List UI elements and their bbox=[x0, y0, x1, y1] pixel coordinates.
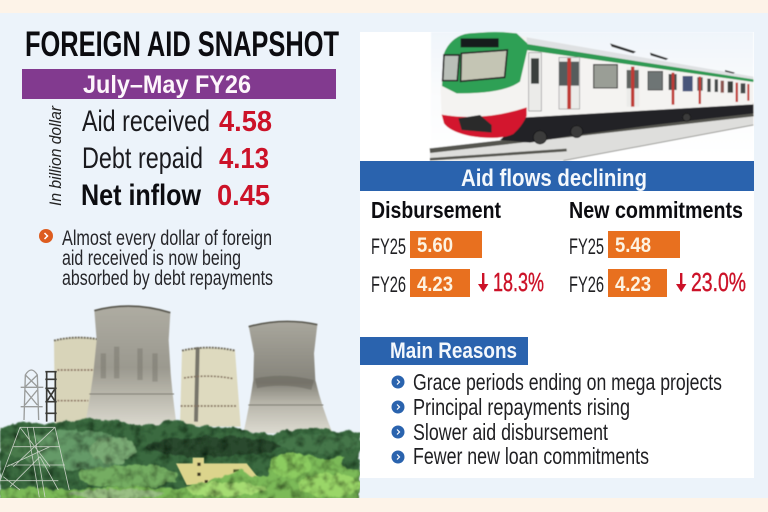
undercarriage bbox=[500, 103, 753, 143]
section banner bbox=[360, 161, 754, 192]
panel: aid flows declining bbox=[360, 161, 754, 297]
FY25 bar: 5.60 bbox=[417, 234, 453, 257]
note text: Almost every dollar of foreign bbox=[62, 227, 272, 250]
row: net inflow: Net inflow bbox=[81, 179, 201, 212]
row: aid received: Aid received bbox=[82, 105, 210, 138]
FY25 label: FY25 bbox=[371, 234, 406, 259]
upper pylon bbox=[21, 370, 43, 420]
panel: main reasons bbox=[360, 337, 722, 469]
reason 2: Principal repayments rising bbox=[413, 394, 630, 420]
note text: absorbed by debt repayments bbox=[62, 267, 273, 290]
FY25 bar: 5.48 bbox=[615, 234, 651, 257]
chart: disbursement bbox=[371, 197, 544, 297]
FY26 bar bbox=[410, 269, 470, 297]
arrow: down bbox=[478, 273, 488, 292]
lower pylon bbox=[0, 427, 69, 497]
foliage bbox=[0, 419, 363, 503]
period banner bbox=[22, 69, 336, 99]
coupler bbox=[458, 115, 492, 133]
house bbox=[176, 458, 260, 485]
side doors and windows bbox=[529, 53, 749, 111]
period banner: July–May FY26 bbox=[83, 71, 251, 99]
photo: metro train bbox=[430, 32, 753, 162]
scaffold tower bbox=[45, 372, 57, 422]
icon: orange bullet bbox=[39, 229, 53, 243]
FY26 label: FY26 bbox=[371, 272, 406, 297]
note text: aid received is now being bbox=[62, 247, 241, 270]
train body bbox=[441, 36, 753, 117]
photo: power plant cooling towers bbox=[0, 306, 363, 510]
top cream band bbox=[0, 0, 768, 13]
row: net inflow: 0.45 bbox=[217, 180, 270, 212]
bright foreground foliage bbox=[0, 452, 360, 498]
heading: Disbursement bbox=[371, 197, 501, 223]
chart: new commitments bbox=[569, 197, 746, 297]
FY25 label: FY25 bbox=[569, 234, 604, 259]
FY25 bar bbox=[608, 231, 680, 258]
reactor building right bbox=[180, 347, 241, 427]
title: FOREIGN AID SNAPSHOT bbox=[25, 25, 339, 64]
row: debt repaid: Debt repaid bbox=[82, 142, 203, 175]
panel: foreign aid snapshot bbox=[22, 25, 339, 290]
panel: white right panel bbox=[360, 32, 754, 478]
change percent: 23.0% bbox=[691, 267, 746, 297]
section banner bbox=[360, 337, 528, 365]
row: aid received: 4.58 bbox=[219, 106, 272, 138]
FY25 bar bbox=[410, 231, 482, 258]
reactor building left bbox=[54, 337, 98, 427]
row: debt repaid: 4.13 bbox=[219, 143, 269, 175]
red nose bbox=[442, 107, 527, 138]
roof shading bbox=[527, 37, 753, 81]
sky backdrop bbox=[431, 32, 753, 162]
green roof line bbox=[527, 44, 753, 82]
wheels bbox=[533, 113, 691, 144]
FY26 bar: 4.23 bbox=[417, 273, 453, 296]
note text bbox=[62, 227, 273, 290]
windshield bbox=[443, 38, 507, 81]
unit label: In billion dollar bbox=[47, 105, 65, 206]
bottom cream band bbox=[0, 498, 768, 512]
FY26 label: FY26 bbox=[569, 272, 604, 297]
track bbox=[430, 112, 753, 161]
cooling tower right bbox=[243, 321, 333, 433]
roof vents bbox=[610, 43, 735, 74]
section banner: Main Reasons bbox=[390, 338, 517, 363]
change percent: 18.3% bbox=[493, 267, 544, 297]
FY26 bar bbox=[608, 269, 667, 297]
nose green bbox=[442, 32, 527, 93]
reason 3: Slower aid disbursement bbox=[413, 419, 608, 445]
arrow: down bbox=[676, 273, 686, 292]
reason 4: Fewer new loan commitments bbox=[413, 443, 649, 469]
section banner: Aid flows declining bbox=[461, 165, 647, 192]
FY26 bar: 4.23 bbox=[615, 273, 651, 296]
cooling tower left bbox=[84, 306, 177, 430]
